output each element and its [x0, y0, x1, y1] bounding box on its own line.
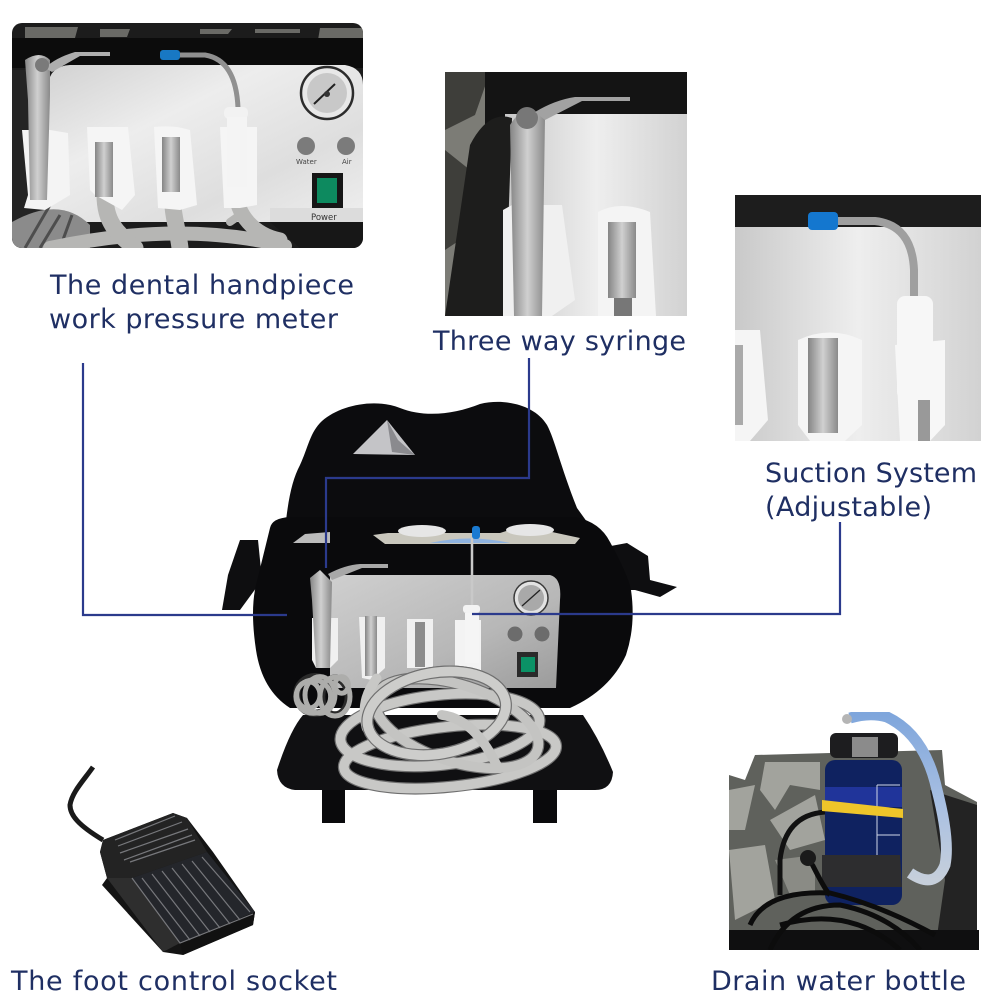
control knobs	[296, 137, 355, 166]
label: foot control socket: The foot control socket	[10, 966, 337, 997]
bottle	[825, 760, 902, 905]
control knobs: Water	[296, 158, 317, 166]
hose coil	[12, 209, 90, 248]
cable	[780, 812, 825, 895]
camouflage bag	[729, 750, 977, 950]
photo: suction system	[735, 195, 981, 441]
bag lid	[285, 402, 600, 540]
steel panel	[48, 65, 363, 222]
left handpiece	[25, 52, 110, 200]
holders	[22, 126, 257, 210]
photo: drain water bottle	[729, 712, 979, 950]
coiled hoses	[337, 661, 559, 798]
power switch: Power	[311, 213, 337, 223]
suction tube	[160, 50, 248, 127]
label: pressure meter: The dental handpiece	[49, 270, 354, 301]
knobs	[508, 626, 522, 642]
label: pressure meter	[49, 270, 354, 335]
steel panel	[330, 575, 560, 688]
front flap	[277, 715, 613, 790]
hose	[850, 715, 946, 880]
green switch	[517, 652, 538, 677]
power switch	[311, 173, 343, 223]
photo: foot pedal	[70, 767, 255, 955]
photo: three way syringe	[445, 72, 687, 316]
mesh triangle	[353, 420, 415, 455]
label: suction system: Suction System	[765, 458, 977, 489]
bag body	[253, 517, 633, 708]
label: three way syringe: Three way syringe	[432, 326, 686, 357]
leader lines	[83, 358, 840, 615]
gray hoses	[50, 188, 285, 248]
label: drain water bottle: Drain water bottle	[711, 966, 966, 997]
gauge	[514, 581, 548, 615]
label: pressure meter: work pressure meter	[49, 304, 339, 335]
handpieces and holders	[312, 618, 338, 668]
photo: dental handpiece pressure meter	[12, 23, 363, 248]
black cables	[748, 862, 931, 930]
side straps	[222, 540, 262, 610]
gauge	[301, 67, 353, 119]
label: suction system	[765, 458, 977, 523]
label: suction system: (Adjustable)	[765, 492, 932, 523]
accessories tray	[373, 525, 580, 544]
small hose coil	[296, 677, 350, 716]
central product: open black bag	[83, 358, 840, 823]
control knobs: Air	[342, 158, 352, 166]
